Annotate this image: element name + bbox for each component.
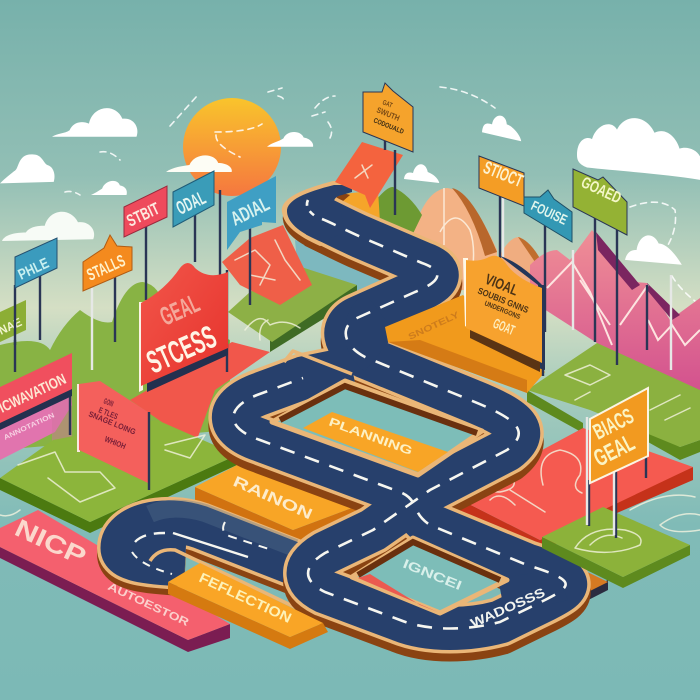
tile: orange under yellow sign [385,295,545,393]
label: SNOTELY: SNOTELY [407,310,461,342]
road border [233,181,566,628]
sign: red success [139,263,228,392]
tile: pink under motivation [0,390,72,460]
sign: yellow goal: GOAT [491,315,517,338]
patch: orange under road top [335,190,380,222]
sign: red start: STBIT [124,199,163,231]
sign: green goaed: GOAED [578,174,624,207]
tile: salmon success base [130,342,270,445]
sky doodle lines [65,87,700,305]
sign: yellow goal: SOUBIS GNNS [476,286,530,315]
sign: blue adial: ADIAL [228,193,273,230]
sign: yellow goal: VIOAL [483,271,520,299]
cloud: mid left [2,212,94,241]
road ridge at left junction [284,351,352,374]
tile: pink NICP [0,510,230,652]
tile: small green lower right [542,507,690,588]
road hole: bottom [352,538,507,613]
sign: pink goal on green tile: E TLES [97,406,120,422]
label: ICANCEI: IGNCEI [401,556,464,593]
road: bottom left loop [122,509,322,620]
sign: top yellow: CODOUALD [372,117,405,136]
cloud: small left [91,181,127,195]
cloud: large right [577,118,700,180]
sign: orange stalls [83,235,132,370]
tile: orange RAINON [195,465,365,546]
cloud: lower right [625,235,682,265]
sun [183,98,281,196]
sign: yellow goal: UNDERGONS [483,300,521,321]
tile: upper green ground [228,265,357,352]
sign: pink goal on green tile [77,381,149,490]
sign: green goaed [573,169,671,370]
sign: pink goal on green tile: WHIOH [103,435,127,451]
cloud: upper left [52,108,137,137]
sign: pink goal on green tile: GOIN [102,397,115,409]
sign: biacs goal: BIACS [589,403,638,444]
label: NICP: NICP [10,514,90,571]
label: REFLECTION: FEFLECTION [197,569,294,626]
hill: green behind tile [365,187,422,250]
mountains: pink range [530,230,700,395]
sign: blue goal: ODAL [173,188,210,220]
sign: blue adial [227,176,276,305]
sign: top yellow [363,83,413,215]
plate: road dark base corner [380,566,608,660]
road dashes [233,200,566,628]
sign: top yellow: GAT [381,99,394,110]
tile: salmon right [455,428,693,552]
label: tile small text: AUTOESTOR [106,581,191,629]
mountain: peach [413,188,545,300]
cloud: top right small [482,116,521,141]
sign: yellow goal [463,256,545,376]
sign: biacs goal [587,388,648,538]
sign: orange stalls: STALLS [84,251,128,285]
gap: teal between road arms [295,240,397,305]
sign: orange stioct [479,156,526,258]
sign: motivation banner [0,353,72,435]
sign: biacs goal: GEAL [589,429,639,472]
sign: blue fouise [524,190,572,332]
mountain: red scribbled [222,225,312,305]
road shadow [233,190,566,636]
label: RAINON: RAINON [230,473,315,523]
cloud: far left [0,154,55,183]
road surface [233,181,568,636]
tile: right green ground [527,343,700,460]
tile: pink under motivation: ANNOTATION [3,412,56,442]
label: PLANNING: PLANNING [327,415,414,458]
ground doodle: water lines [0,495,700,532]
tile: left green ground [0,420,237,533]
sign: pink goal on green tile: SNAGE LOING [87,410,137,437]
cloud: sun right [267,132,313,147]
sign: small green far left [0,300,26,372]
road hole: planning [272,381,482,475]
label: road text progress: WADOSSS [468,584,548,631]
label: STCESS: STCESS [141,318,222,380]
sign: blue fouise: FOUISE [529,197,570,228]
road asphalt [233,185,568,628]
sign: red start [124,186,167,300]
label: GEAL: GEAL [155,288,204,331]
cloud: behind top sign [404,164,439,183]
sign: top yellow: SWUTH [375,106,401,123]
hills: left green [0,282,230,450]
sign: blue far left [15,238,57,345]
sign: blue far left: PHLE [16,255,52,284]
sign: orange stioct: STIOCT [481,157,526,191]
sign: blue goal [173,171,220,275]
tile: red orange top [335,142,403,208]
cloud: sun front [166,155,232,172]
tile: orange REFLECTION [168,563,328,649]
